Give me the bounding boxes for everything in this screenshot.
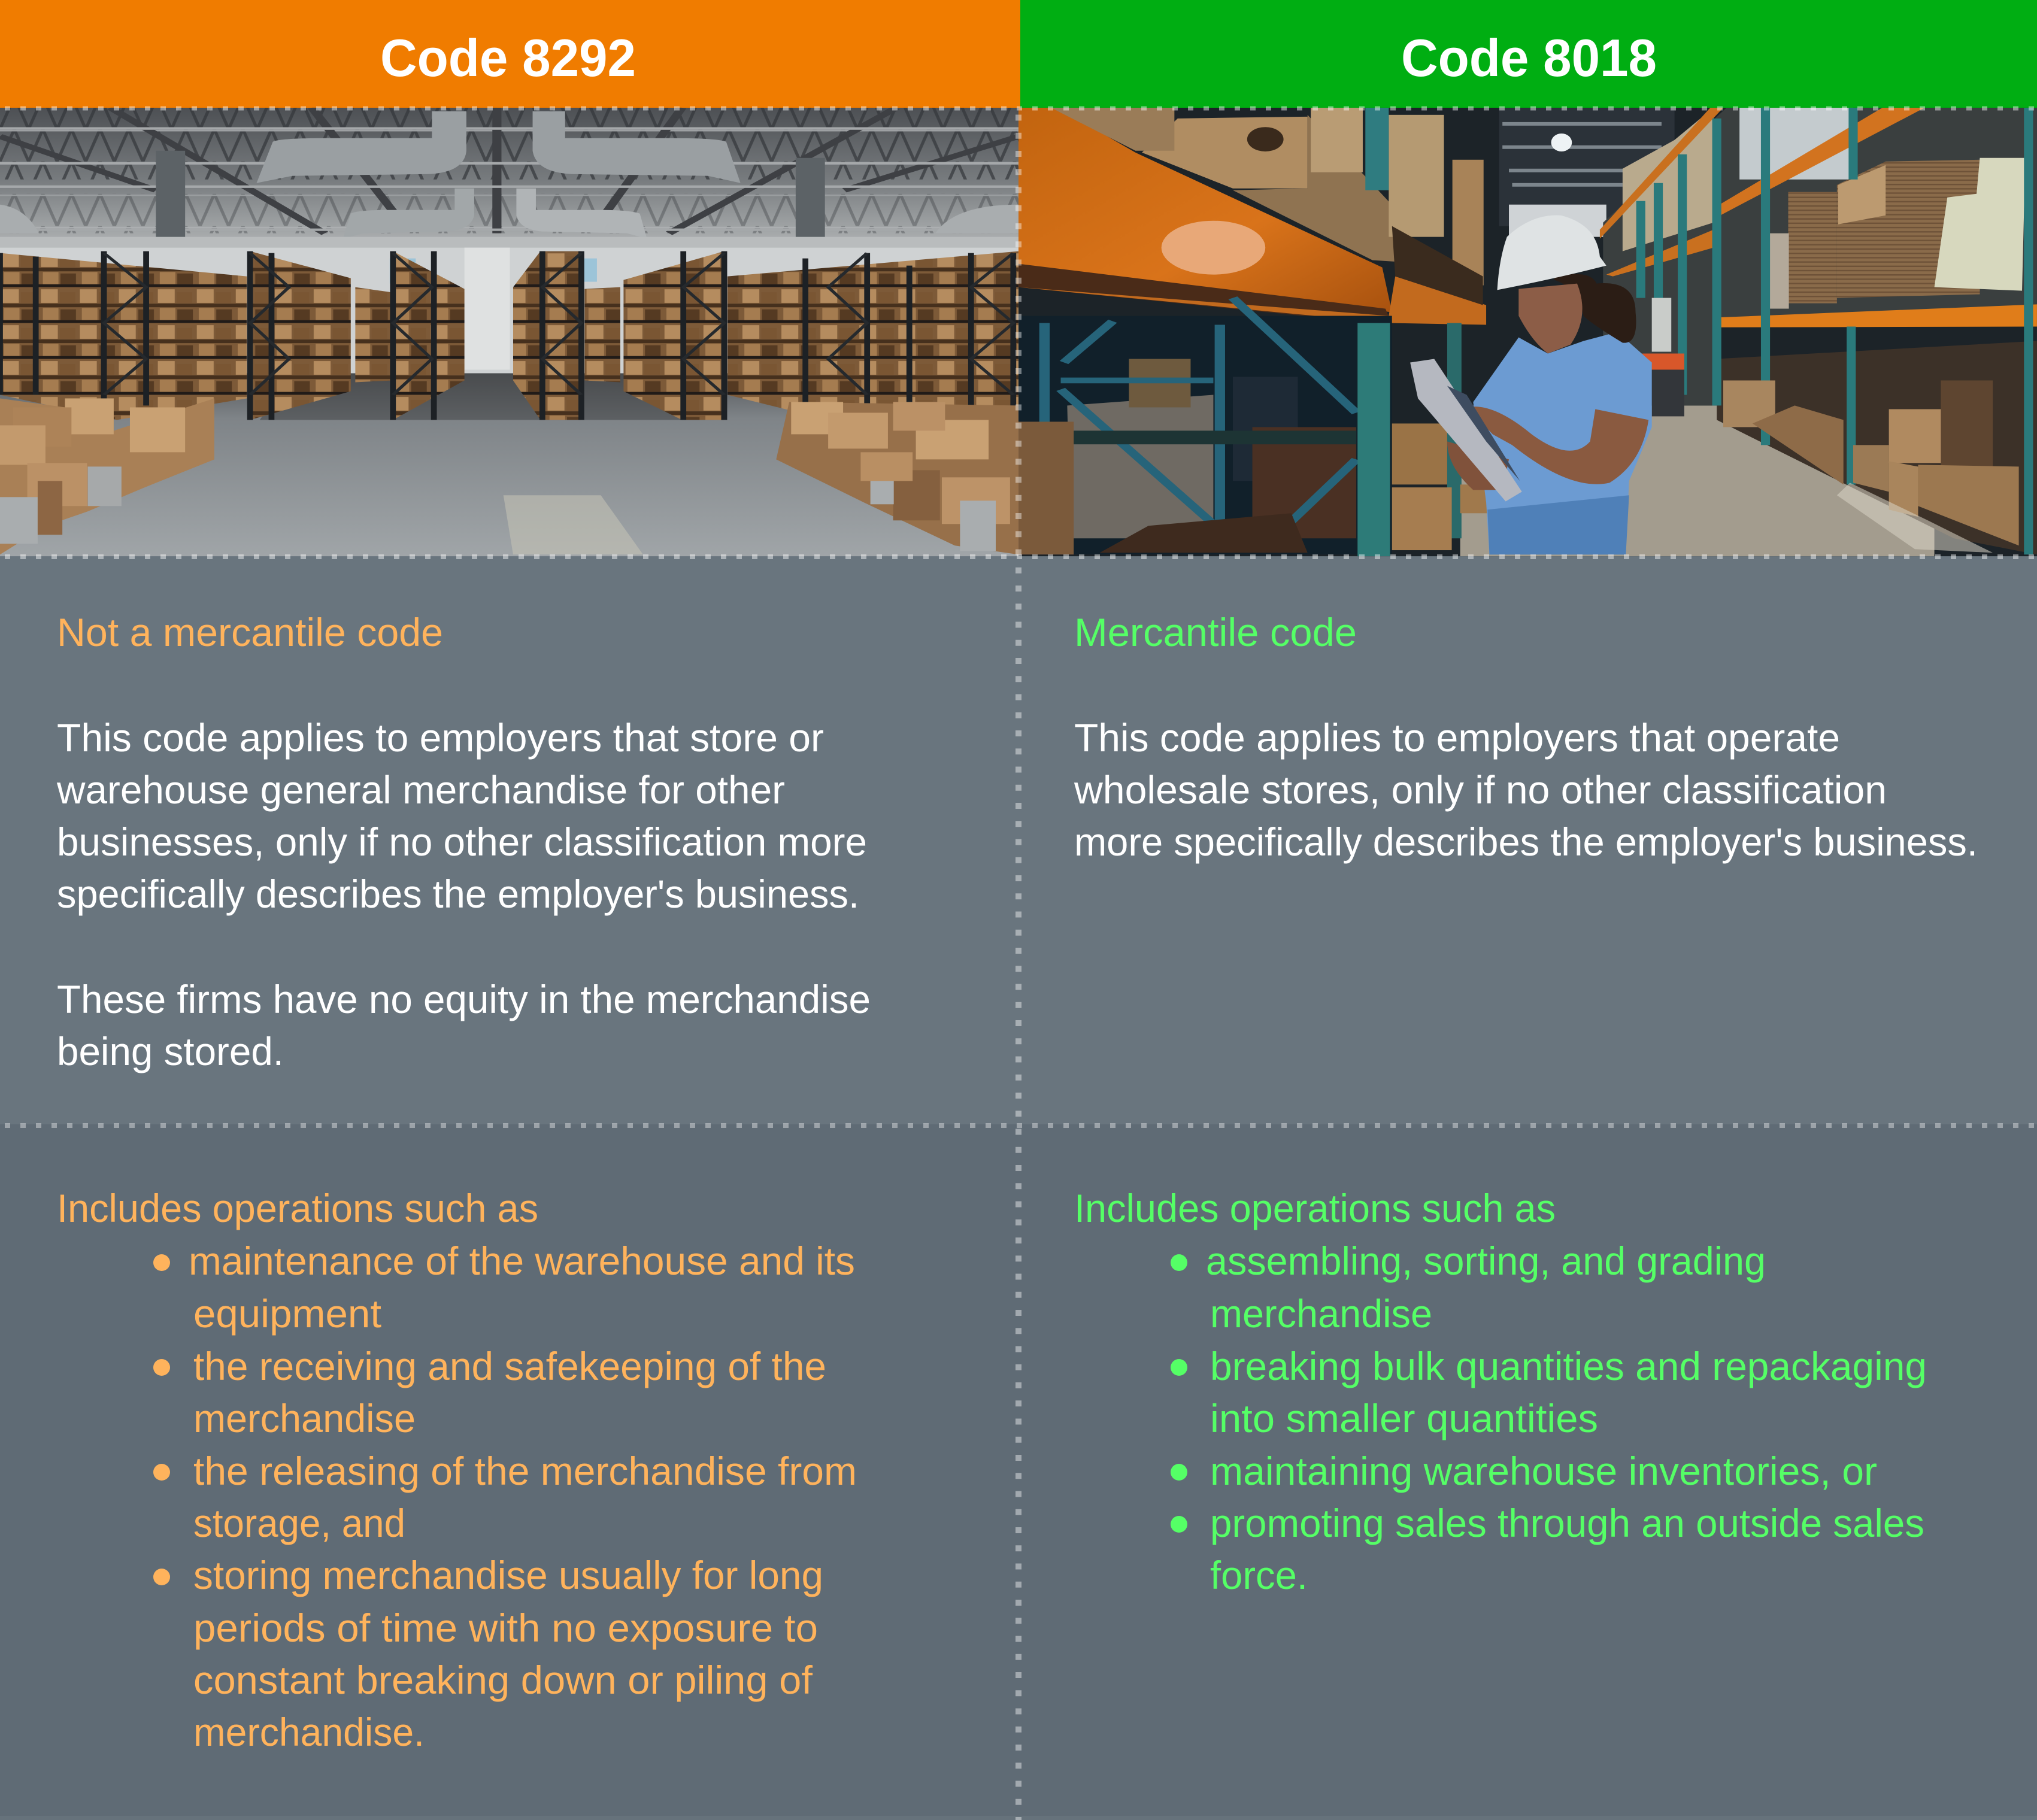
bullet: breaking bulk: into smaller quantities <box>1210 1396 1598 1440</box>
bullet: storing: storing merchandise usually for long <box>193 1553 823 1597</box>
subheading: mercantile code: Mercantile code <box>1074 610 1357 654</box>
paragraph: no equity: These firms have no equity in the merchandise <box>57 977 871 1021</box>
paragraph: what code 8292 applies to <box>56 715 867 916</box>
paragraph: what code 8292 applies to: businesses, only if no other classification more <box>57 820 867 864</box>
paragraph: no equity: being stored. <box>57 1029 284 1073</box>
bullet: breaking bulk <box>1171 1344 1927 1440</box>
bullet: breaking bulk: breaking bulk quantities and repackaging <box>1210 1344 1927 1388</box>
bullet: releasing: storage, and <box>193 1501 405 1545</box>
bullet: storing: merchandise. <box>193 1710 425 1754</box>
bullet: receiving: the receiving and safekeeping of the <box>193 1344 826 1388</box>
bullet: maintenance: maintenance of the warehouse and its <box>189 1239 855 1283</box>
description text: code 8018 <box>1074 610 1978 864</box>
bullet: assembling <box>1171 1239 1766 1336</box>
column: code 8018 <box>1018 0 2037 1597</box>
bullet: receiving <box>153 1344 826 1440</box>
bullet: maintenance: equipment <box>193 1291 381 1336</box>
list heading: Includes operations such as <box>57 1186 538 1230</box>
header bar: Code 8292 <box>0 0 1020 108</box>
bullet: maintaining inventories: maintaining warehouse inventories, or <box>1210 1449 1877 1493</box>
bullet: promoting sales <box>1171 1501 1924 1597</box>
bullet: storing: constant breaking down or piling of <box>193 1658 813 1702</box>
paragraph: what code 8018 applies to <box>1074 715 1978 864</box>
panel: lower operations background <box>0 1124 2037 1816</box>
bullet: receiving: merchandise <box>193 1396 416 1440</box>
operations list: code 8018 <box>1074 1186 1927 1597</box>
bottom strip <box>0 1816 2037 1820</box>
paragraph: what code 8292 applies to: warehouse general merchandise for other <box>56 768 785 812</box>
header bar: Code 8018 <box>1020 0 2037 108</box>
paragraph: what code 8292 applies to: specifically describes the employer's business. <box>57 872 859 916</box>
column: code 8292 <box>0 0 1020 1754</box>
header bar: Code 8292: Code 8292 <box>380 28 636 87</box>
paragraph: what code 8018 applies to: wholesale stores, only if no other classification <box>1074 768 1887 812</box>
bullet: storing <box>153 1553 823 1754</box>
subheading: not a mercantile code: Not a mercantile code <box>57 610 443 654</box>
operations list: code 8292 <box>57 1186 857 1754</box>
bullet: promoting sales: force. <box>1210 1553 1308 1597</box>
paragraph: what code 8018 applies to: more specifically describes the employer's business. <box>1074 820 1978 864</box>
bullet: assembling: merchandise <box>1210 1291 1432 1336</box>
bullet: storing: periods of time with no exposure to <box>193 1606 818 1650</box>
photo: warehouse interior with racks of boxes <box>0 108 1018 556</box>
paragraph: what code 8292 applies to: This code applies to employers that store or <box>57 715 824 760</box>
list heading: Includes operations such as <box>1074 1186 1556 1230</box>
paragraph: what code 8018 applies to: This code applies to employers that operate <box>1074 715 1840 760</box>
panel: upper description background <box>0 554 2037 1124</box>
photo: worker in hard hat with clipboard in warehouse aisle <box>1018 108 2037 556</box>
bullet: releasing <box>153 1449 857 1545</box>
bullet: assembling: assembling, sorting, and grading <box>1206 1239 1766 1283</box>
bullet: releasing: the releasing of the merchandise from <box>193 1449 857 1493</box>
description text: code 8292 <box>56 610 871 1073</box>
header bar: Code 8018: Code 8018 <box>1401 28 1657 87</box>
paragraph: no equity <box>57 977 871 1073</box>
bullet: maintenance <box>153 1239 855 1336</box>
bullet: promoting sales: promoting sales through an outside sales <box>1210 1501 1924 1545</box>
